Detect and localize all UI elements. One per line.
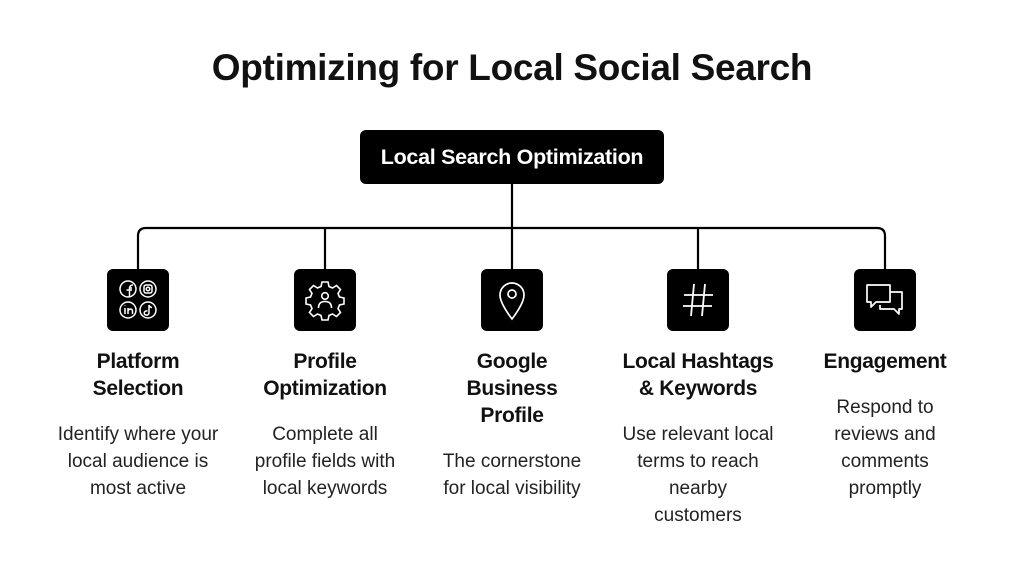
column: Platform Selection: Platform: [97, 350, 179, 373]
column: Profile Optimization: Optimization: [263, 377, 387, 400]
column: Local Hashtags & Keywords: & Keywords: [639, 377, 757, 400]
column: Local Hashtags & Keywords: Use relevant local: [622, 424, 774, 445]
column: Engagement: Respond to: [836, 397, 934, 418]
column: Local Hashtags & Keywords: terms to reach: [637, 451, 759, 472]
title: Optimizing for Local Social Search: [212, 47, 812, 88]
column: Profile Optimization: Profile: [293, 350, 357, 373]
column: Local Hashtags & Keywords: Local Hashtags: [622, 350, 774, 373]
column: Platform Selection: Selection: [93, 377, 183, 400]
root node: Local Search Optimization: [360, 130, 664, 184]
column: Local Hashtags & Keywords: [622, 350, 774, 526]
column: Profile Optimization: profile fields with: [255, 451, 395, 472]
icon: social platforms: [107, 269, 169, 331]
column: Platform Selection: [58, 350, 218, 499]
column: Google Business Profile: Google: [477, 350, 547, 373]
column: Engagement: comments: [841, 451, 929, 472]
column: Platform Selection: most active: [90, 478, 186, 499]
column: Local Hashtags & Keywords: nearby: [669, 478, 727, 499]
column: Engagement: promptly: [849, 478, 921, 499]
column: Engagement: reviews and: [834, 424, 936, 445]
column: Google Business Profile: The cornerstone: [443, 451, 581, 472]
column: Google Business Profile: for local visibility: [443, 478, 581, 499]
column: Profile Optimization: [255, 350, 395, 499]
icon: hashtag: [667, 269, 729, 331]
column: Platform Selection: Identify where your: [58, 424, 218, 445]
column: Local Hashtags & Keywords: customers: [654, 505, 742, 526]
column: Google Business Profile: Business: [466, 377, 557, 400]
column: Platform Selection: local audience is: [68, 451, 208, 472]
column: Profile Optimization: Complete all: [272, 424, 378, 445]
root node: Local Search Optimization: Local Search Optimization: [381, 145, 643, 169]
icon: map pin: [481, 269, 543, 331]
column: Engagement: [823, 350, 947, 499]
icon: profile gear: [294, 269, 356, 331]
column: Engagement: Engagement: [823, 350, 947, 373]
icon: chat bubbles: [854, 269, 916, 331]
column: Google Business Profile: Profile: [480, 404, 544, 427]
column: Profile Optimization: local keywords: [263, 478, 387, 499]
column: Google Business Profile: [443, 350, 581, 499]
